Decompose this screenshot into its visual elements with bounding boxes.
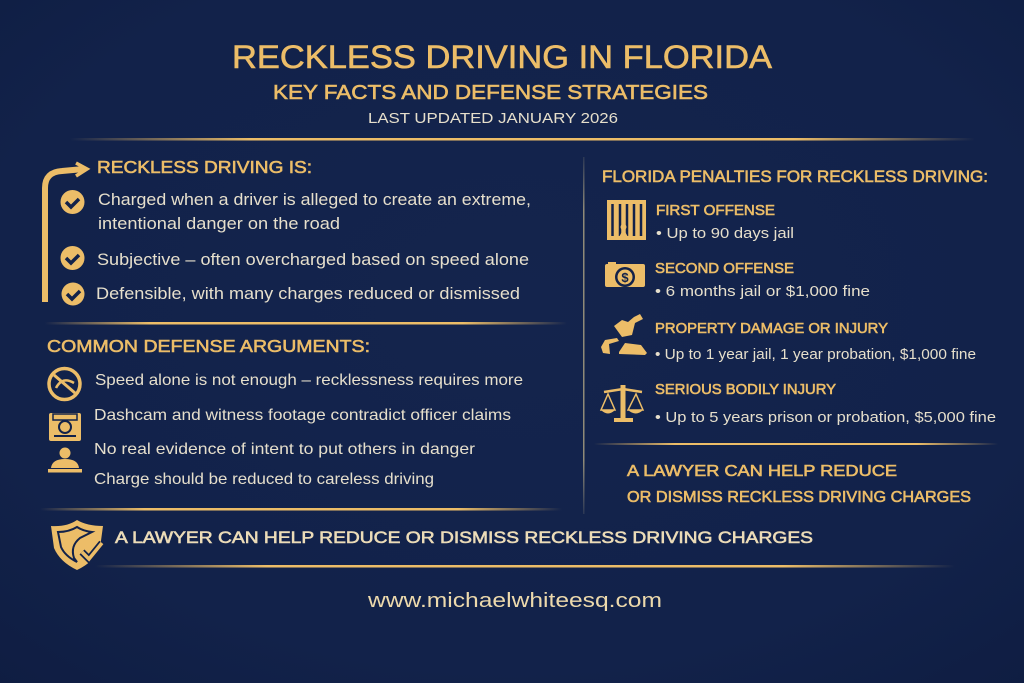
defense text: no evidence: No real evidence of intent to put others in danger (94, 441, 476, 458)
item text: Charged when a driver is alleged to create an extreme, (98, 191, 531, 209)
penalty: property damage or injury (655, 321, 976, 363)
panel: reckless driving is (45, 157, 531, 306)
icon: shield with check (51, 520, 103, 570)
heading: reckless driving is: RECKLESS DRIVING IS: (97, 157, 312, 177)
item text (98, 191, 531, 233)
penalty heading: SERIOUS BODILY INJURY (655, 382, 836, 398)
item: subjective (60, 246, 529, 270)
penalty: second offense (655, 261, 870, 300)
header (232, 39, 773, 127)
icon: money (605, 262, 645, 287)
item text: intentional danger on the road (98, 215, 340, 233)
icon: check (60, 190, 84, 214)
panel: florida penalties (601, 168, 996, 426)
icon: person at desk (48, 448, 82, 472)
last updated date: LAST UPDATED JANUARY 2026 (368, 111, 618, 127)
penalty heading: PROPERTY DAMAGE OR INJURY (655, 321, 888, 337)
penalty: first offense (656, 203, 794, 242)
defense text: dashcam: Dashcam and witness footage contradict officer claims (94, 407, 511, 424)
icon: property damage (601, 314, 647, 355)
website: www.michaelwhiteesq.com (367, 590, 662, 612)
item text: Defensible, with many charges reduced or dismissed (96, 285, 520, 303)
defense text: speed alone: Speed alone is not enough – recklessness requires more (95, 372, 523, 389)
heading: florida penalties: FLORIDA PENALTIES FOR RECKLESS DRIVING: (602, 168, 988, 186)
icon: bent arrow (45, 163, 87, 302)
penalty heading: FIRST OFFENSE (656, 203, 775, 219)
callout: lawyer can help: A LAWYER CAN HELP REDUCE (627, 463, 897, 480)
icon: check (60, 246, 84, 270)
icon: jail cell (607, 200, 646, 240)
penalty detail: • Up to 90 days jail (656, 226, 794, 242)
panel: common defense arguments (47, 336, 523, 488)
callout: lawyer can help: OR DISMISS RECKLESS DRIVING CHARGES (627, 489, 971, 506)
item: charged (60, 190, 531, 233)
item: defensible (62, 282, 520, 306)
banner text: A LAWYER CAN HELP REDUCE OR DISMISS RECKLESS DRIVING CHARGES (115, 528, 813, 547)
item text: Subjective – often overcharged based on speed alone (97, 251, 529, 269)
penalty detail: • Up to 1 year jail, 1 year probation, $1,000 fine (655, 347, 976, 363)
icon: money: $ (621, 270, 629, 285)
defense text: careless driving: Charge should be reduced to careless driving (94, 471, 434, 488)
heading: common defense arguments: COMMON DEFENSE ARGUMENTS: (47, 336, 370, 356)
title: RECKLESS DRIVING IN FLORIDA (232, 39, 773, 75)
icon: check (62, 282, 84, 306)
icon: no speeding (49, 368, 80, 400)
callout: lawyer can help (627, 463, 971, 506)
penalty heading: SECOND OFFENSE (655, 261, 794, 277)
penalty detail: • 6 months jail or $1,000 fine (655, 284, 870, 300)
icon: dashcam (49, 413, 81, 441)
penalty: serious bodily injury (655, 382, 996, 426)
subtitle: KEY FACTS AND DEFENSE STRATEGIES (273, 82, 708, 104)
banner: lawyer can help (51, 520, 813, 570)
icon: scales of justice (601, 385, 643, 422)
penalty detail: • Up to 5 years prison or probation, $5,000 fine (655, 410, 996, 426)
